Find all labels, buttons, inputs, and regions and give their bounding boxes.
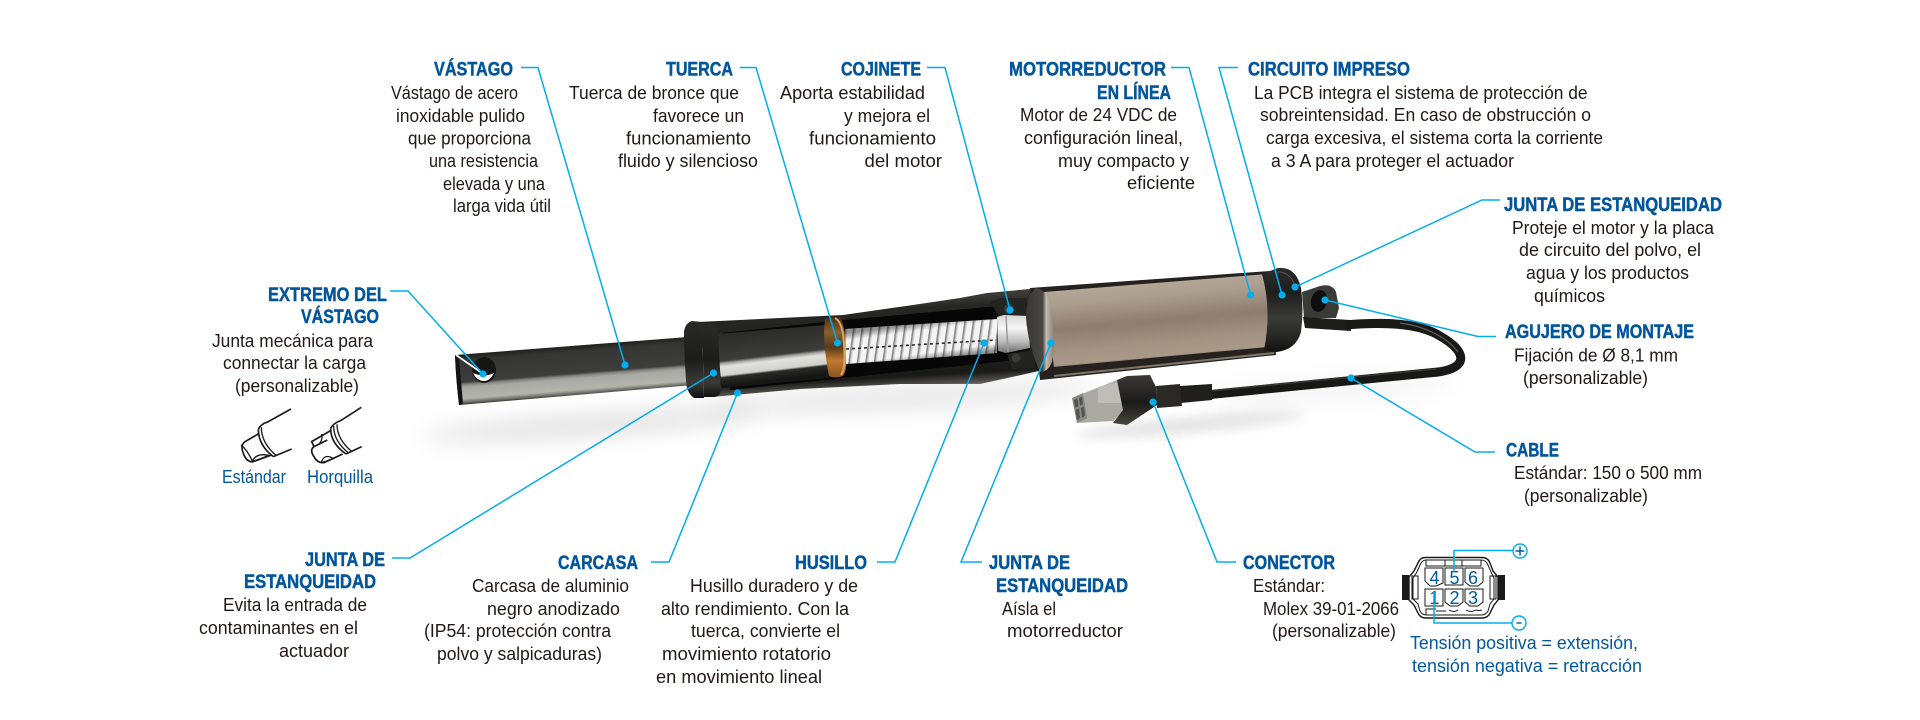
description: La PCB integra el sistema de protección de <box>1254 83 1588 103</box>
description <box>424 576 629 664</box>
heading: ESTANQUEIDAD <box>996 576 1128 597</box>
side clips <box>1402 575 1505 600</box>
callout: carcasa <box>424 389 741 664</box>
leader line <box>1321 296 1496 336</box>
description: funcionamiento <box>626 128 751 148</box>
callout: circuito impreso <box>1219 60 1603 299</box>
connector pinout diagram <box>1402 544 1527 630</box>
description: y mejora el <box>844 106 930 126</box>
lead screw (husillo) <box>845 319 997 364</box>
description: Husillo duradero y de <box>690 576 858 596</box>
pin numbers: 4 <box>1429 568 1440 588</box>
heading: ESTANQUEIDAD <box>244 572 376 593</box>
callout: husillo <box>656 339 988 687</box>
icon: standard rod end <box>241 409 292 462</box>
description: funcionamiento <box>809 128 936 148</box>
cable <box>1205 317 1461 395</box>
heading: CONECTOR <box>1243 553 1335 574</box>
leader line <box>392 369 717 558</box>
description: (personalizable) <box>1523 368 1648 388</box>
leader line <box>1149 398 1236 562</box>
voltage note: tensión negativa = retracción <box>1412 656 1642 676</box>
icon: fork rod end <box>312 407 362 463</box>
callout: extremo del vástago <box>212 285 487 396</box>
heading: VÁSTAGO <box>301 306 379 328</box>
description: Junta mecánica para <box>212 331 374 351</box>
description <box>1514 463 1702 506</box>
voltage note: Tensión positiva = extensión, <box>1410 633 1638 653</box>
description <box>1002 599 1123 641</box>
label: Estándar: Estándar <box>222 467 286 487</box>
leader line <box>1219 68 1286 299</box>
description: Proteje el motor y la placa <box>1512 218 1715 238</box>
description <box>1253 576 1399 641</box>
description: Molex 39-01-2066 <box>1263 599 1399 619</box>
description: en movimiento lineal <box>656 667 822 687</box>
leader line <box>961 339 1055 562</box>
soft ground shadows <box>420 372 1460 446</box>
callout: cable <box>1347 374 1702 506</box>
motor tube body <box>1030 271 1276 380</box>
description: a 3 A para proteger el actuador <box>1271 151 1514 171</box>
heading: HUSILLO <box>795 553 867 574</box>
description: polvo y salpicaduras) <box>437 644 602 664</box>
seal ring between housing and motor <box>1026 288 1054 372</box>
description: de circuito del polvo, el <box>1519 240 1701 260</box>
description: contaminantes en el <box>199 618 358 638</box>
mounting eye <box>1302 285 1339 318</box>
description: una resistencia <box>429 151 539 171</box>
callout: vástago <box>391 58 629 369</box>
housing (carcasa) <box>698 289 1052 397</box>
description: alto rendimiento. Con la <box>661 599 850 619</box>
description: muy compacto y <box>1058 151 1189 171</box>
description: (personalizable) <box>1272 621 1396 641</box>
description: motorreductor <box>1007 621 1123 641</box>
rod (vástago) <box>455 337 694 405</box>
description: Tuerca de bronce que <box>569 83 739 103</box>
inner rod <box>716 325 830 388</box>
heading: CIRCUITO IMPRESO <box>1248 60 1410 80</box>
heading: CABLE <box>1506 440 1559 462</box>
callout: tuerca <box>569 60 841 347</box>
actuator illustration <box>420 268 1461 446</box>
heading <box>989 553 1128 597</box>
end cap <box>1262 268 1302 352</box>
description: Estándar: <box>1253 576 1325 596</box>
description: (personalizable) <box>1524 486 1648 506</box>
polarity lines and symbols <box>1434 544 1527 630</box>
description: (personalizable) <box>235 376 359 396</box>
description: agua y los productos <box>1526 263 1689 283</box>
pin numbers: 6 <box>1468 568 1478 588</box>
heading: JUNTA DE <box>305 550 385 571</box>
heading: VÁSTAGO <box>434 58 513 80</box>
description: negro anodizado <box>487 599 620 619</box>
description: elevada y una <box>443 174 546 194</box>
leader line <box>521 68 629 369</box>
description: sobreintensidad. En caso de obstrucción o <box>1260 105 1591 125</box>
housing outline <box>1409 558 1498 618</box>
description: del motor <box>864 151 942 171</box>
description: Fijación de Ø 8,1 mm <box>1514 346 1678 366</box>
description: que proporciona <box>408 128 532 148</box>
callout: junta de estanqueidad (extremo) <box>199 369 717 661</box>
callout: cojinete <box>780 60 1014 314</box>
description: actuador <box>279 641 349 661</box>
heading: MOTORREDUCTOR <box>1009 60 1166 80</box>
description <box>656 576 858 687</box>
description: Motor de 24 VDC de <box>1020 105 1177 125</box>
description <box>212 331 374 396</box>
description <box>569 83 758 171</box>
callout: junta de estanqueidad (motorreductor) <box>961 339 1128 641</box>
description <box>391 83 551 216</box>
description: configuración lineal, <box>1024 128 1183 148</box>
description: (IP54: protección contra <box>424 621 612 641</box>
description: eficiente <box>1127 173 1195 193</box>
bronze nut (tuerca) <box>824 317 847 378</box>
description <box>1512 218 1715 306</box>
heading: COJINETE <box>841 60 921 80</box>
callout: conector <box>1149 398 1399 641</box>
callout: junta de estanqueidad (motor) <box>1291 195 1722 306</box>
description: Aporta estabilidad <box>780 83 925 103</box>
pin numbers: 3 <box>1468 588 1478 608</box>
heading: JUNTA DE <box>989 553 1070 574</box>
leader line <box>390 291 487 378</box>
description: tuerca, convierte el <box>691 621 840 641</box>
heading <box>244 550 385 593</box>
description: favorece un <box>653 106 744 126</box>
leader line <box>651 389 741 562</box>
description: larga vida útil <box>453 196 551 216</box>
label: Horquilla: Horquilla <box>307 467 374 487</box>
description: Evita la entrada de <box>223 595 367 615</box>
leader line <box>1291 200 1500 291</box>
description: carga excesiva, el sistema corta la corriente <box>1266 128 1603 148</box>
description <box>1020 105 1195 193</box>
pin numbers <box>1429 568 1478 608</box>
pin numbers: 2 <box>1449 588 1460 608</box>
leader line <box>1347 374 1495 452</box>
leader line <box>740 68 841 347</box>
heading: CARCASA <box>558 553 638 574</box>
description <box>1254 83 1603 171</box>
leader line <box>927 68 1014 314</box>
pin numbers: 1 <box>1429 588 1440 608</box>
heading: TUERCA <box>666 60 733 80</box>
description: químicos <box>1534 286 1605 306</box>
leader line <box>1171 68 1254 299</box>
pin numbers: 5 <box>1449 568 1460 588</box>
description: connectar la carga <box>223 353 367 373</box>
heading: EXTREMO DEL <box>268 285 387 306</box>
description <box>199 595 367 661</box>
description: fluido y silencioso <box>618 151 758 171</box>
description: inoxidable pulido <box>396 106 525 126</box>
heading <box>1009 60 1171 104</box>
heading: JUNTA DE ESTANQUEIDAD <box>1504 195 1722 216</box>
heading: EN LÍNEA <box>1097 82 1171 104</box>
heading <box>268 285 387 328</box>
description: Estándar: 150 o 500 mm <box>1514 463 1702 483</box>
end flange <box>684 321 721 398</box>
callout: agujero de montaje <box>1321 296 1694 388</box>
leader line <box>877 339 988 562</box>
callout: motorreductor en línea <box>1009 60 1254 299</box>
description: Carcasa de aluminio <box>472 576 629 596</box>
description <box>780 83 942 171</box>
description: Aísla el <box>1002 599 1056 619</box>
description: Vástago de acero <box>391 83 518 103</box>
heading: AGUJERO DE MONTAJE <box>1505 322 1694 343</box>
description <box>1514 346 1678 388</box>
voltage note <box>1410 633 1642 676</box>
connector <box>1072 375 1212 425</box>
bearing and collar (cojinete) <box>990 298 1034 369</box>
description: movimiento rotatorio <box>662 644 831 664</box>
